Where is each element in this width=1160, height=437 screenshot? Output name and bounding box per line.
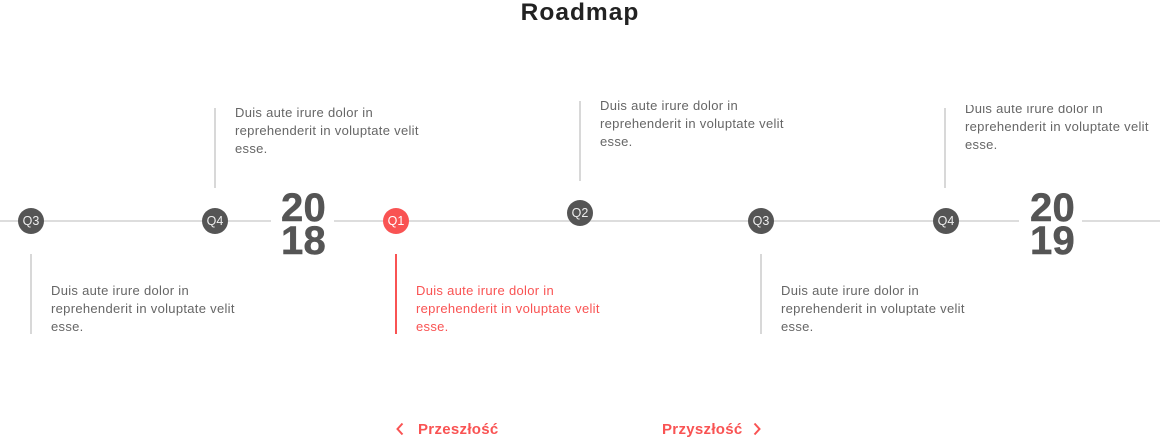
connector Q4 2019 — [944, 108, 946, 188]
marker Q1 2019 active — [383, 208, 409, 234]
marker Q4 2019: Q4 — [938, 214, 954, 228]
note Q1 2019: reprehenderit in voluptate velit — [416, 301, 600, 316]
note Q4 2019 clipped: esse. — [965, 137, 998, 152]
note Q4 2018: esse. — [235, 141, 268, 156]
marker Q3 2019 — [748, 208, 774, 234]
note Q1 2019: Duis aute irure dolor in — [416, 283, 554, 298]
note Q4 2018 — [235, 105, 419, 156]
marker Q2 2019 — [567, 200, 593, 226]
note Q3 2018: reprehenderit in voluptate velit — [51, 301, 235, 316]
connector Q3 2019 — [760, 254, 762, 334]
year label 2019: 20 — [1030, 186, 1075, 230]
note Q3 2018 — [51, 283, 235, 334]
note Q3 2019 — [781, 283, 965, 334]
note Q1 2019 — [416, 283, 600, 334]
note Q2 2019: esse. — [600, 134, 633, 149]
marker Q4 2018 — [202, 208, 228, 234]
connector Q3 2018 — [30, 254, 32, 334]
marker Q3 2018: Q3 — [23, 214, 39, 228]
year label 2019: 19 — [1030, 219, 1075, 263]
year label 2019 — [1030, 186, 1075, 263]
note Q4 2019 clipped: reprehenderit in voluptate velit — [965, 119, 1149, 134]
note Q3 2019: esse. — [781, 319, 814, 334]
note Q4 2018: Duis aute irure dolor in — [235, 105, 373, 120]
note Q3 2019: reprehenderit in voluptate velit — [781, 301, 965, 316]
marker Q4 2018: Q4 — [207, 214, 223, 228]
marker Q4 2019 — [933, 208, 959, 234]
marker Q2 2019: Q2 — [572, 206, 588, 220]
connector Q1 2019 — [395, 254, 397, 334]
year label 2018 — [281, 186, 326, 263]
icon: left chevron — [396, 422, 404, 436]
note Q3 2018: esse. — [51, 319, 84, 334]
marker Q3 2019: Q3 — [753, 214, 769, 228]
note Q2 2019: Duis aute irure dolor in — [600, 98, 738, 113]
note Q2 2019 — [600, 98, 784, 149]
note Q4 2019 clipped — [965, 105, 1149, 152]
note Q4 2018: reprehenderit in voluptate velit — [235, 123, 419, 138]
note Q3 2018: Duis aute irure dolor in — [51, 283, 189, 298]
note Q2 2019: reprehenderit in voluptate velit — [600, 116, 784, 131]
note Q3 2019: Duis aute irure dolor in — [781, 283, 919, 298]
marker Q3 2018 — [18, 208, 44, 234]
connector Q2 2019 — [579, 101, 581, 181]
year label 2018: 18 — [281, 219, 326, 263]
marker Q1 2019 active: Q1 — [388, 214, 404, 228]
year label 2018: 20 — [281, 186, 326, 230]
icon: right chevron — [754, 422, 761, 436]
timeline axis — [0, 220, 1160, 222]
connector Q4 2018 — [214, 108, 216, 188]
note Q1 2019: esse. — [416, 319, 449, 334]
